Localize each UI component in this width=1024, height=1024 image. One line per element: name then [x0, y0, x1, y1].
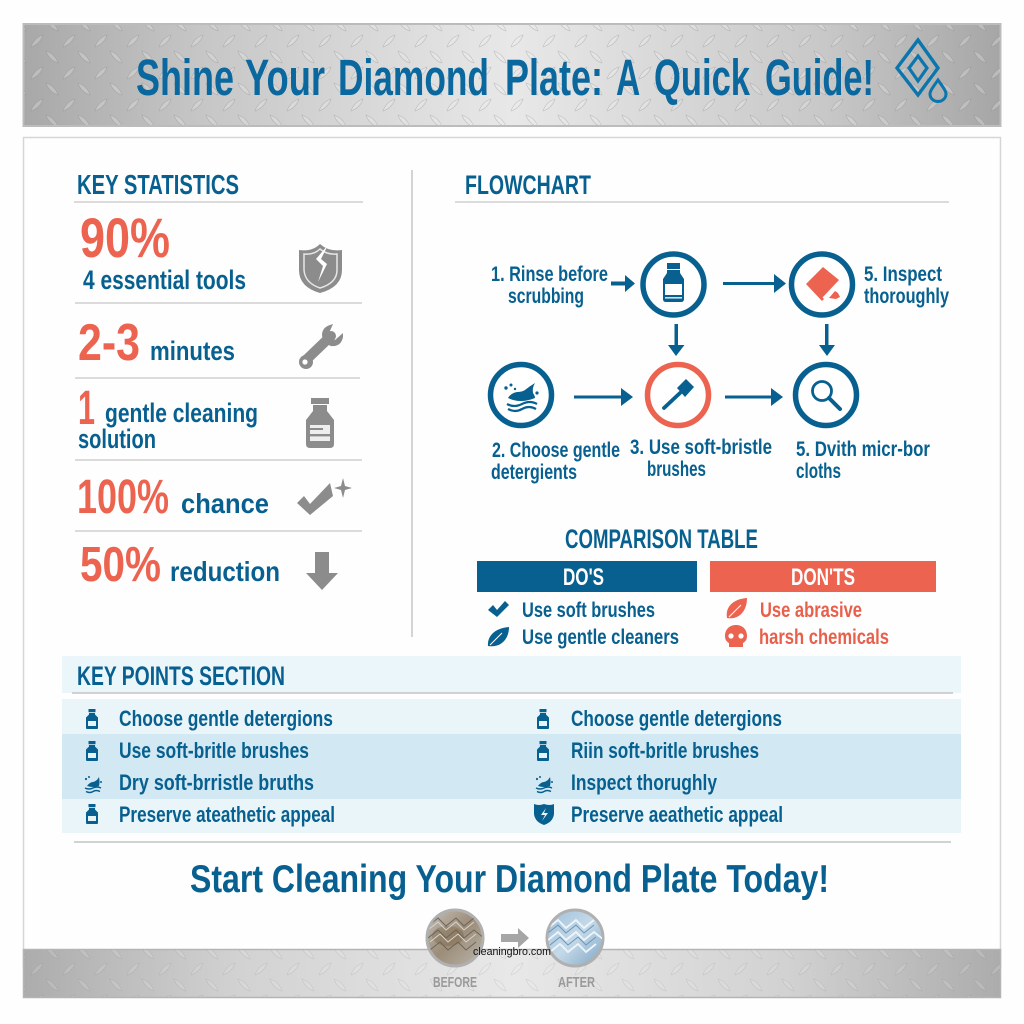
step 3 label: [630, 436, 772, 481]
before label: BEFORE: [433, 974, 477, 991]
stat label: reduction: reduction: [170, 556, 280, 587]
step 3 label: 3. Use soft-bristle: [630, 436, 772, 459]
arrow: [668, 324, 684, 356]
step 1 label: [491, 263, 608, 308]
icon: bottle circle: [643, 254, 704, 315]
stat label: gentle cleaning solution: solution: [78, 424, 156, 454]
panel: key statistics: [74, 169, 363, 592]
title: Quick: [654, 49, 750, 106]
do: soft brushes: Use soft brushes: [522, 599, 655, 622]
before image: [427, 910, 484, 966]
title: Plate:: [505, 49, 603, 106]
step 3 label: brushes: [647, 458, 706, 481]
step 2 label: detergients: [491, 461, 577, 484]
icon: bottle: [86, 804, 98, 824]
panel: flowchart: [455, 170, 949, 484]
stat: 1: 1: [78, 382, 95, 435]
icon: splash: [536, 776, 553, 792]
do's header: DO'S: [563, 564, 604, 591]
step 1 label: scrubbing: [508, 285, 584, 308]
panel: comparison table: [477, 524, 936, 649]
step 2 label: 2. Choose gentle: [492, 439, 620, 462]
title: Guide!: [765, 49, 874, 106]
point: preserve aeathetic: Preserve aeathetic appeal: [571, 802, 783, 827]
icon: diamond with drop: [897, 40, 946, 102]
icon: bottle: [537, 709, 549, 729]
title: Diamond: [338, 49, 489, 106]
panel: key points section: [62, 656, 961, 842]
do: gentle cleaners: Use gentle cleaners: [522, 626, 679, 649]
icon: shield: [534, 804, 554, 825]
arrow: [501, 928, 529, 948]
step 5 cloths label: [796, 438, 930, 483]
point: choose gentle detergions: Choose gentle detergions: [119, 706, 333, 731]
heading: flowchart: FLOWCHART: [465, 170, 591, 200]
step 1 label: 1. Rinse before: [491, 263, 608, 286]
watermark: cleaningbro.com: [473, 946, 551, 958]
heading: comparison table: COMPARISON TABLE: [565, 524, 758, 554]
point: inspect thorughly: Inspect thorughly: [571, 770, 718, 795]
step 5 cloths label: cloths: [796, 460, 841, 483]
step 5 cloths label: 5. Dvith micr-bor: [796, 438, 930, 461]
footer banner: [24, 910, 1000, 998]
stat label: essential tools: 4 essential tools: [83, 265, 246, 295]
header banner: [24, 24, 1000, 126]
arrow: [611, 275, 635, 292]
after image: [547, 910, 604, 966]
stat label: minutes: minutes: [150, 336, 235, 366]
step 5 inspect label: [864, 263, 949, 308]
icon: bottle: [537, 741, 549, 761]
step 5 inspect label: thoroughly: [864, 285, 949, 308]
icon: water circle: [490, 364, 552, 426]
icon: check: [488, 601, 509, 617]
stat label: gentle cleaning solution: [78, 398, 258, 454]
stat label: gentle cleaning solution: gentle cleaning: [105, 398, 258, 428]
don't: abrasive: Use abrasive: [760, 599, 862, 622]
icon: bottle: [306, 398, 334, 448]
point: riin soft-britle: Riin soft-britle brushes: [571, 738, 759, 763]
icon: red leaf: [727, 598, 747, 618]
arrow: [574, 388, 633, 406]
icon: brush circle: [648, 364, 708, 426]
don'ts header: [710, 561, 936, 592]
heading: key points: KEY POINTS SECTION: [77, 661, 285, 691]
icon: splash: [85, 776, 102, 792]
title: Shine: [136, 49, 234, 106]
don'ts header: DON'TS: [791, 564, 855, 591]
icon: bottle: [86, 741, 98, 761]
arrow: [725, 388, 783, 406]
arrow: [819, 324, 835, 356]
icon: check with sparkle: [297, 478, 352, 515]
icon: leaf: [488, 627, 509, 646]
call to action: Start Cleaning Your Diamond Plate Today!: [190, 858, 829, 901]
main panel: [24, 138, 1000, 968]
point: soft-britle brushes: Use soft-britle brushes: [119, 738, 309, 763]
title: A: [616, 49, 640, 106]
don't: harsh chemicals: harsh chemicals: [759, 626, 889, 649]
stat label: chance: chance: [181, 488, 269, 519]
arrow: [723, 274, 786, 293]
icon: cracked shield: [299, 244, 342, 293]
icon: wrench: [299, 324, 343, 369]
icon: skull: [725, 625, 747, 647]
icon: bottle: [86, 709, 98, 729]
stat: 100%: 100%: [77, 471, 169, 524]
heading: key statistics: KEY STATISTICS: [77, 169, 239, 200]
icon: cloth circle: [792, 254, 852, 315]
do's header: [477, 561, 697, 592]
stat: 50%: 50%: [80, 538, 161, 592]
step 5 inspect label: 5. Inspect: [864, 263, 942, 286]
icon: down arrow: [306, 552, 338, 590]
stat: 90%: 90%: [80, 206, 170, 269]
step 2 label: [491, 439, 620, 484]
point: choose gentle detergions right: Choose gentle detergions: [571, 706, 782, 731]
after label: AFTER: [558, 974, 595, 991]
point: dry soft-brristle: Dry soft-brristle bruths: [119, 770, 314, 795]
stat: 2-3: 2-3: [78, 314, 140, 372]
icon: magnifier circle: [796, 364, 856, 426]
title: Your: [245, 49, 325, 106]
point: preserve ateathetic: Preserve ateathetic appeal: [119, 802, 335, 827]
